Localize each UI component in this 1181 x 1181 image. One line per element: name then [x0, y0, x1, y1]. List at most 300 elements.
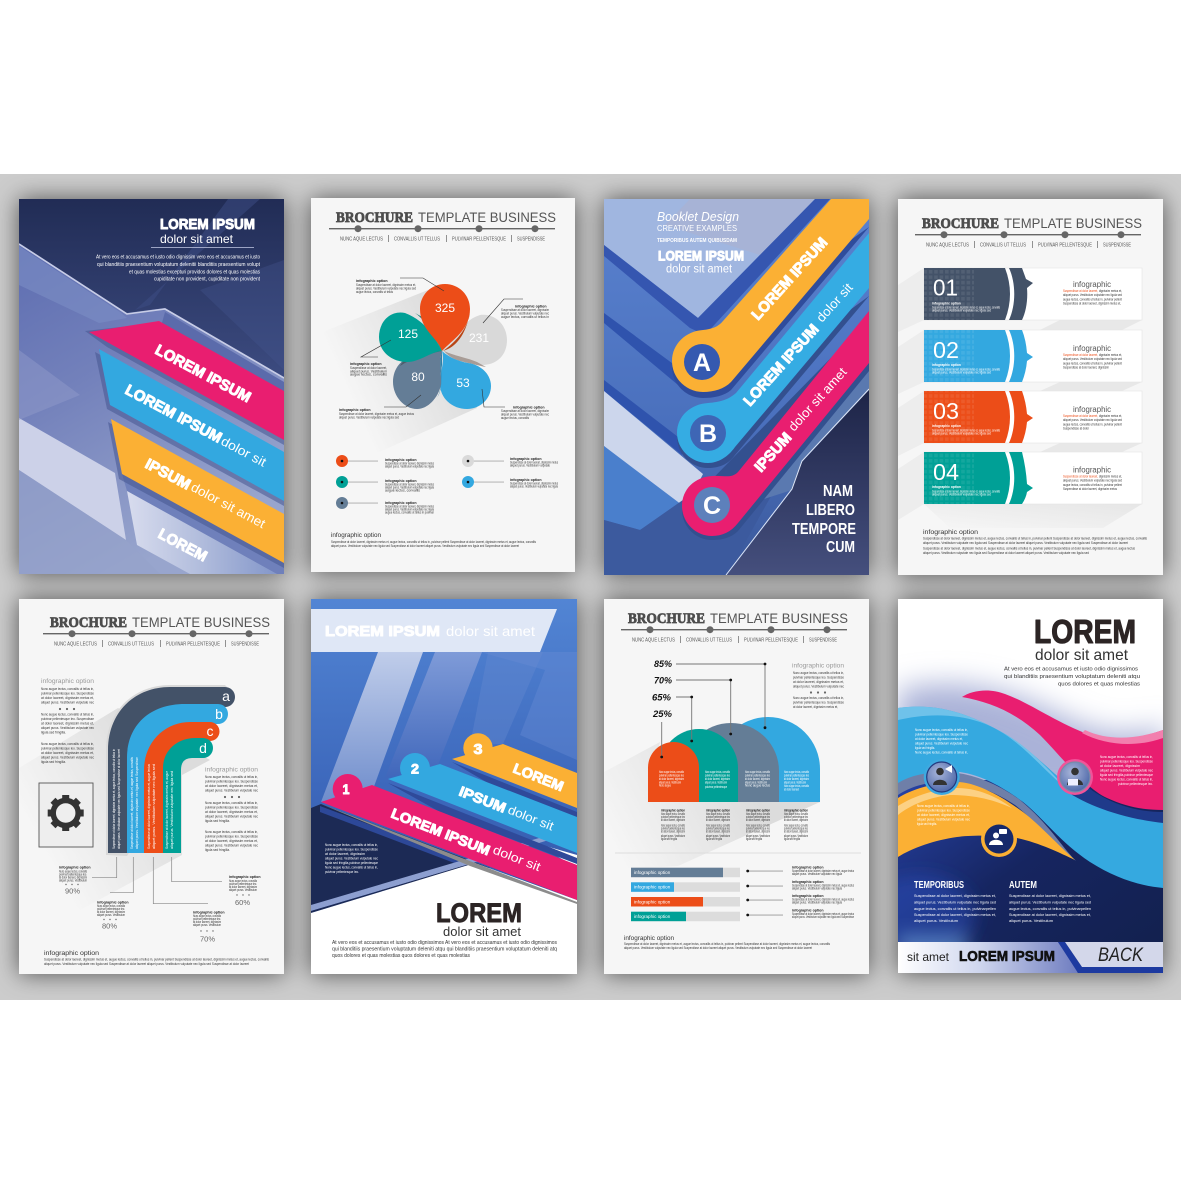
- percent labels: [59, 866, 261, 944]
- panel 3 heading: LOREM IPSUM: [658, 248, 744, 264]
- top title: [1004, 613, 1140, 688]
- arch text: Nunc augue: [659, 784, 671, 788]
- legend: infographic option: [385, 501, 417, 505]
- icon: megaphone person: [924, 759, 960, 795]
- percent connectors: 25%: [652, 709, 672, 719]
- callout text blocks: Suspendisse at dolor laoreet, dignissim metus et,: [356, 283, 416, 287]
- arch text: at dolor laoreet, dignissim: [745, 777, 770, 781]
- step 03: augue lectus, convallis ut tellus in, pulvinar pellent: [1063, 422, 1122, 426]
- navy base: [898, 780, 1163, 973]
- dark wedge text: Nunc augue lectus, convallis ut tellus in,: [325, 866, 378, 870]
- text columns below arches: aliquet purus. Vestibulum: [706, 834, 730, 838]
- percent labels: infographic option: [97, 900, 129, 904]
- step 03: Suspendisse at dolor laoreet, dignissim metus et, augue lectus, convallis: [932, 428, 1000, 432]
- step 01: infographic: [1073, 280, 1111, 289]
- orange wave text: ligula sed fringilla.: [917, 822, 937, 826]
- panel 5 footer text: Suspendisse at dolor laoreet, dignissim metus et, augue lectus, convallis ut tellus in, pulvinar pellent Suspendisse at dolor laoreet, dignissim metus et, augue lectus, convallis: [44, 958, 269, 962]
- left text column: at dolor laoreet, dignissim metus et,: [41, 722, 94, 726]
- capsule B: blue: [677, 233, 869, 468]
- dark wedge text: pulvinar pellentesque leo.: [325, 870, 359, 874]
- text columns below arches: Nunc augue lectus, convallis: [706, 824, 730, 828]
- arrow band: blue: [95, 349, 284, 506]
- step 01: 01: [933, 274, 958, 300]
- panel 2 header: TEMPLATE BUSINESS: [418, 210, 556, 225]
- panel 7 footer text: Suspendisse at dolor laoreet, dignissim metus et, augue lectus, convallis ut tellus in, pulvinar pellent Suspendisse at dolor laoreet, dignissim metus et, augue lectus, convallis: [624, 942, 830, 946]
- panel 4 header: PULVINAR PELLENTESQUE: [1038, 242, 1092, 248]
- right text column: pulvinar pellentesque leo. Suspendisse: [205, 806, 258, 810]
- left text column: Nunc augue lectus, convallis ut tellus in,: [41, 712, 94, 716]
- bar descriptions: Suspendisse at dolor laoreet, dignissim metus et, augue lectus: [792, 898, 854, 902]
- panel 5 footer text: aliquet purus. Vestibulum vulputate nec ligula sed Suspendisse at dolor laoreet aliquet purus. Vestibulum vulputate nec ligula sed Suspendisse at dolor laoreet: [44, 962, 249, 966]
- text columns below arches: infographic option: [784, 808, 808, 812]
- pink wave text: Nunc augue lectus, convallis ut tellus in,: [1100, 755, 1153, 759]
- blue wave: [898, 707, 1163, 888]
- left text column: aliquet purus. Vestibulum vulputate nec: [41, 700, 94, 704]
- panel 7 footer text: [624, 935, 830, 950]
- legend: [336, 455, 558, 514]
- top right text: Nunc augue lectus, convallis ut tellus in,: [793, 671, 844, 675]
- left text column: at dolor laoreet, dignissim metus et,: [41, 696, 94, 700]
- arch text: Nunc augue lectus, convallis: [745, 770, 770, 774]
- arch text: pulvinar pellentesque leo: [659, 774, 684, 778]
- text columns below arches: infographic option: [661, 808, 685, 812]
- panel 6 title: At vero eos et accusamus et iusto odio dignissimos At vero eos et accusamus et iusto odio dignissimos: [332, 940, 557, 946]
- legend: infographic option: [510, 457, 542, 461]
- panel 1: blue cover with arrows: [19, 199, 284, 578]
- bar descriptions: aliquet purus. Vestibulum vulputate nec ligula: [792, 872, 842, 876]
- panel 3: booklet cover: [604, 199, 869, 575]
- percent labels: aliquet purus. Vestibulum: [229, 888, 257, 892]
- panel 6 title: [332, 898, 557, 959]
- panel 7 footer text: aliquet purus. Vestibulum vulputate nec ligula sed Suspendisse at dolor laoreet aliquet purus. Vestibulum vulputate nec ligula sed Suspendisse at dolor laoreet: [624, 946, 812, 950]
- text columns below arches: ligula sed fringilla: [746, 837, 762, 841]
- panel 1 paragraph: et quas molestias excepturi providos dolores et quas molestias: [129, 269, 260, 275]
- bar leader lines: [746, 870, 783, 916]
- top right text: pulvinar pellentesque leo. Suspendisse: [793, 676, 844, 680]
- text columns below arches: pulvinar pellentesque leo: [746, 815, 770, 819]
- callout text blocks: Suspendisse at dolor laoreet,: [350, 366, 387, 370]
- step 03: Suspendisse at dolor: [1063, 427, 1090, 431]
- dark wedge text: Nunc augue lectus, convallis ut tellus in,: [325, 843, 378, 847]
- blue wave text: ligula sed fringilla.: [915, 746, 935, 750]
- icon: laptop person: [1057, 759, 1093, 795]
- connector lines: [92, 857, 222, 904]
- pink wave text: pulvinar pellentesque leo. Suspendisse: [1100, 760, 1153, 764]
- capsule A: orange: [672, 199, 869, 398]
- capsule C: pink: IPSUM: [751, 429, 795, 476]
- panel 2 footer text: [331, 532, 536, 548]
- panel 5 header: NUNC AQUE LECTUS: [54, 642, 97, 648]
- panel 2 header: NUNC AQUE LECTUS: [340, 236, 383, 242]
- panel 4 footer text: [923, 529, 1147, 555]
- bar descriptions: infographic option: [792, 908, 824, 912]
- percent labels: aliquet purus. Vestibulum: [193, 923, 221, 927]
- panel 1 heading: [151, 216, 255, 248]
- curved bands: aliquet purus. Vestibulum vulputate nec ligula sed Suspendisse at dolor laoreet: [117, 749, 121, 849]
- percent labels: 60%: [235, 898, 250, 907]
- dark wedge text: [325, 843, 378, 874]
- step 03: aliquet purus. Vestibulum vulputate nec ligula sed: [932, 432, 991, 436]
- step 02: augue lectus, convallis ut tellus in, pulvinar pellent: [1063, 361, 1122, 365]
- text columns below arches: at dolor laoreet, dignissim: [746, 830, 770, 834]
- panel 5 header: CONVALLIS UT TELLUS: [108, 642, 154, 648]
- text columns below arches: Nunc augue lectus, convallis: [661, 824, 685, 828]
- panel 2 header: PULVINAR PELLENTESQUE: [452, 236, 506, 242]
- arch text: Nunc augue lectus, convallis: [705, 770, 730, 774]
- dark wedge text: ligula sed fringilla,pulvinar pellentesque: [325, 861, 378, 865]
- column: temporibus: [914, 880, 996, 923]
- step 01: Suspendisse at dolor laoreet, dignissim metus et, augue lectus, convallis: [932, 306, 1000, 310]
- percent connectors: [652, 659, 766, 758]
- text columns below arches: at dolor laoreet, dignissim: [784, 818, 808, 822]
- arrow band: orange: [108, 419, 284, 568]
- top title: quos dolores et quas molestias: [1058, 682, 1140, 688]
- orange wave text: aliquet purus. Vestibulum vulputate nec: [917, 818, 970, 822]
- right text column: ligula sed fringilla.: [205, 848, 230, 852]
- text columns below arches: ligula sed fringilla: [706, 837, 722, 841]
- panel 2 header: [329, 210, 556, 242]
- left text column: [41, 678, 94, 764]
- ribbon 3: orange: [452, 733, 577, 818]
- step 01: Suspendisse at dolor laoreet, dignissim metus et,: [1063, 302, 1121, 306]
- panel 3 heading: CREATIVE EXAMPLES: [657, 223, 737, 233]
- ribbon 1: pink: dolor sit: [491, 843, 543, 874]
- text columns below arches: pulvinar pellentesque leo: [706, 826, 730, 830]
- top right text: aliquet purus. Vestibulum vulputate nec: [793, 684, 844, 688]
- percent labels: Nunc augue lectus, convallis: [59, 870, 87, 874]
- arrow band: translucent lorem: LOREM: [155, 526, 210, 565]
- bar descriptions: aliquet purus. Vestibulum vulputate nec ligula: [792, 886, 842, 890]
- blue wave text: pulvinar pellentesque leo. Suspendisse: [915, 732, 968, 736]
- legend: Suspendisse at dolor laoreet, dignissim metus: [385, 504, 434, 508]
- right text column: Nunc augue lectus, convallis ut tellus in,: [205, 801, 258, 805]
- arch text: at dolor laoreet, dignissim: [659, 777, 684, 781]
- ribbon 3: orange: 3: [474, 741, 482, 758]
- percent labels: Nunc augue lectus, convallis: [229, 879, 257, 883]
- bar descriptions: Suspendisse at dolor laoreet, dignissim metus et, augue lectus: [792, 912, 854, 916]
- text columns below arches: Nunc augue lectus, convallis: [746, 824, 770, 828]
- legend: augue lectus, convallis ut tellus in pulvinar: [385, 510, 435, 514]
- left text column: ligula sed fringilla.: [41, 730, 66, 734]
- progress bars: infographic option: [634, 899, 671, 904]
- percent labels: 90%: [65, 886, 80, 896]
- top right text: infographic option: [792, 662, 844, 670]
- arch text: aliquet purus. Vestibulum: [705, 780, 727, 784]
- callout text blocks: augue lectus, convallis ut tellus: [356, 290, 393, 294]
- left text column: ligula sed fringilla.: [41, 760, 66, 764]
- left text column: infographic option: [41, 678, 94, 685]
- dark wedge text: at dolor laoreet, dignissim: [325, 852, 365, 856]
- column: autem: aliquet purus. Vestibulum vulputate nec ligula sed: [1009, 900, 1091, 904]
- dark wedge: [311, 804, 562, 913]
- page canvas: [0, 174, 1181, 1000]
- panel 3 heading: TEMPORIBUS AUTEM QUIBUSDAM: [657, 238, 737, 244]
- text columns below arches: at dolor laoreet, dignissim: [661, 830, 685, 834]
- right text column: at dolor laoreet, dignissim metus et,: [205, 810, 258, 814]
- right text column: Nunc augue lectus, convallis ut tellus in,: [205, 775, 258, 779]
- percent labels: infographic option: [59, 866, 91, 870]
- column: autem: aliquet purus. Vestibulum: [1009, 919, 1053, 923]
- blue wave text: Nunc augue lectus, convallis ut tellus in,: [915, 750, 968, 754]
- panel 7 header: [621, 611, 848, 644]
- pink wave text: ligula sed fringilla,pulvinar pellentesque: [1100, 773, 1153, 777]
- curved bands: Suspendisse at dolor laoreet, dignissim metus et, augue lectus, convallis ut tellus in: [112, 749, 116, 849]
- text columns below arches: at dolor laoreet, dignissim: [706, 830, 730, 834]
- column: autem: Suspendisse at dolor laoreet, dignissim metus et,: [1009, 913, 1091, 917]
- panel 4 header: TEMPLATE BUSINESS: [1004, 216, 1142, 231]
- curved bands: Suspendisse at dolor laoreet, dignissim metus et, augue lectus: [147, 764, 151, 849]
- dark corner: CUM: [826, 539, 855, 556]
- legend: aliquet purus. Vestibulum vulputate nec ligula: [510, 484, 558, 488]
- long shadow: [604, 742, 820, 870]
- bar descriptions: infographic option: [792, 880, 824, 884]
- arch text: Nunc augue lectus, convallis: [784, 784, 809, 788]
- callout text blocks: Suspendisse at dolor laoreet, dignissim metus et, augue lectus: [339, 412, 414, 416]
- step 01: aliquet purus. Vestibulum vulputate nec ligula sed: [1063, 293, 1122, 297]
- text columns below arches: Nunc augue lectus, convallis: [784, 812, 808, 816]
- step 02: infographic: [1073, 344, 1111, 353]
- legend: aliquet purus. Vestibulum vulputate nec ligula: [385, 486, 434, 490]
- bar descriptions: infographic option: [792, 894, 824, 898]
- percent connectors: 70%: [654, 676, 672, 686]
- step 04: Suspendisse at dolor laoreet, dignissim metus et,: [1063, 474, 1122, 478]
- panel 1 heading: LOREM IPSUM: [160, 216, 255, 233]
- panel 5 header: BROCHURE: [50, 615, 127, 631]
- column: autem: Suspendisse at dolor laoreet, dignissim metus et,: [1009, 894, 1091, 898]
- panel 2: petal chart sheet: [311, 198, 575, 572]
- pink wave text: Nunc augue lectus, convallis ut tellus in,: [1100, 778, 1153, 782]
- step 04: Suspendisse at dolor laoreet, dignissim metus: [1063, 487, 1117, 491]
- legend: Suspendisse at dolor laoreet, dignissim metus: [510, 460, 558, 464]
- panel 4 footer text: infographic option: [923, 529, 978, 536]
- legend: Suspendisse at dolor laoreet, dignissim metus: [385, 482, 434, 486]
- right text column: aliquet purus. Vestibulum vulputate nec: [205, 844, 258, 848]
- percent labels: pulvinar pellentesque leo.: [193, 917, 221, 921]
- top title: qui blanditiis praesentium voluptatum deleniti atqu: [1004, 674, 1140, 680]
- percent labels: 70%: [200, 934, 215, 944]
- dark corner: [726, 389, 869, 575]
- ribbon 2: blue: dolor sit: [506, 803, 556, 834]
- arch text: pulvinar pellentesque leo: [705, 774, 730, 778]
- top right text: at dolor laoreet, dignissim metus et,: [793, 680, 844, 684]
- callout text blocks: Suspendisse at dolor laoreet, dignissim: [501, 308, 549, 312]
- text columns below arches: at dolor laoreet, dignissim: [784, 830, 808, 834]
- panel 6 title: quos dolores et quas molestias quos dolores et quas molestias: [332, 953, 470, 959]
- curved bands: aliquet purus. Vestibulum vulputate nec ligula sed: [170, 771, 174, 849]
- orange wave text: pulvinar pellentesque leo. Suspendisse: [917, 808, 970, 812]
- column: temporibus: aliquet purus. Vestibulum: [914, 919, 958, 923]
- arch text: aliquet purus. Vestibulum: [745, 780, 767, 784]
- arrow band: pink: [85, 321, 284, 445]
- panel 5 header: PULVINAR PELLENTESQUE: [166, 642, 220, 648]
- step 01: [924, 268, 1142, 320]
- legend: aliquet purus. Vestibulum vulputate nec ligula: [385, 464, 434, 468]
- arch text: at dolor laoreet: [784, 788, 799, 792]
- long shadow: [43, 708, 210, 890]
- column: temporibus: TEMPORIBUS: [914, 880, 964, 891]
- step 04: Suspendisse at dolor laoreet, dignissim metus et, augue lectus, convallis: [932, 490, 1000, 494]
- top banner: dolor sit amet: [446, 623, 535, 639]
- percent labels: pulvinar pellentesque leo.: [97, 907, 125, 911]
- panel 6 title: dolor sit amet: [443, 924, 521, 939]
- step 02: [924, 330, 1142, 382]
- step 04: infographic option: [932, 485, 961, 489]
- callout text blocks: infographic option: [515, 304, 547, 308]
- arrow band: blue: LOREM IPSUM: [122, 382, 225, 447]
- pink wave text: aliquet purus. Vestibulum vulputate nec: [1100, 768, 1153, 772]
- pink wave text: at dolor laoreet, dignissim: [1100, 764, 1140, 768]
- petal chart long shadow: [355, 290, 477, 438]
- text columns below arches: ligula sed fringilla: [784, 837, 800, 841]
- panel 4 header: SUSPENDISSE: [1103, 242, 1131, 248]
- callout text blocks: Suspendisse at dolor laoreet, dignissim: [501, 409, 549, 413]
- pink wave: [962, 690, 1163, 823]
- petal: 80: 80: [411, 370, 425, 384]
- percent labels: aliquet purus. Vestibulum: [59, 878, 87, 882]
- right text column: Nunc augue lectus, convallis ut tellus in,: [205, 830, 258, 834]
- callout text blocks: augue lectus, convallis: [501, 416, 529, 420]
- text columns below arches: pulvinar pellentesque leo: [746, 826, 770, 830]
- text columns below arches: at dolor laoreet, dignissim: [706, 818, 730, 822]
- panel 7: arches chart sheet: [604, 599, 869, 974]
- top banner: LOREM IPSUM: [325, 623, 440, 640]
- right text column: at dolor laoreet, dignissim metus et,: [205, 839, 258, 843]
- right text column: aliquet purus. Vestibulum vulputate nec: [205, 814, 258, 818]
- text columns below arches: pulvinar pellentesque leo: [784, 826, 808, 830]
- panel 6 title: qui blanditiis praesentium voluptatum deleniti atqu qui blanditiis praesentium voluptatum deleniti atq: [332, 946, 557, 952]
- petal: 231: 231: [469, 331, 489, 345]
- bar descriptions: Suspendisse at dolor laoreet, dignissim metus et, augue lectus: [792, 884, 854, 888]
- text columns below arches: Nunc augue lectus, convallis: [706, 812, 730, 816]
- left text column: aliquet purus. Vestibulum vulputate nec: [41, 756, 94, 760]
- grey backdrop band: [0, 174, 1181, 1000]
- arrow band: pink: LOREM IPSUM: [152, 342, 254, 406]
- arrow band: orange: dolor sit amet: [189, 479, 268, 531]
- right text column: at dolor laoreet, dignissim metus et,: [205, 784, 258, 788]
- column: autem: augue lectus, convallis ut tellus in, pulvinarpellen: [1009, 907, 1091, 911]
- legend: augue lectus, convallis: [385, 488, 420, 492]
- percent connectors: 85%: [654, 659, 672, 669]
- petal: 125: 125: [398, 327, 418, 341]
- curved bands: [106, 685, 235, 856]
- text columns below arches: at dolor laoreet, dignissim: [746, 818, 770, 822]
- arches: [648, 717, 820, 802]
- text columns below arches: Nunc augue lectus, convallis: [661, 812, 685, 816]
- top banner: [311, 609, 557, 652]
- panel 1 paragraph: cupiditate non provident, cupiditate non provident: [154, 276, 261, 282]
- panel 3 heading: [657, 209, 744, 276]
- percent labels: at dolor laoreet, dignissim: [59, 876, 87, 880]
- petal: 53: 53: [456, 376, 470, 390]
- text columns below arches: pulvinar pellentesque leo: [661, 815, 685, 819]
- text columns below arches: aliquet purus. Vestibulum: [661, 834, 685, 838]
- arch text: at dolor laoreet, dignissim: [784, 777, 809, 781]
- capsule B: blue: LOREM IPSUM: [740, 321, 823, 410]
- dark wedge text: pulvinar pellentesque leo. Suspendisse: [325, 848, 378, 852]
- callout text blocks: aliquet purus. Vestibulum vulputate nec: [501, 412, 549, 416]
- step 04: augue lectus, convallis ut tellus in, pulvinar pellent: [1063, 483, 1122, 487]
- orange wave: [898, 772, 1076, 861]
- percent connectors: 65%: [652, 692, 671, 702]
- ribbon 2: blue: IPSUM: [457, 783, 508, 816]
- right text column: [205, 766, 258, 852]
- orange wave text: Nunc augue lectus, convallis ut tellus in,: [917, 804, 970, 808]
- panel 7 header: BROCHURE: [628, 611, 705, 627]
- panel 3 heading: dolor sit amet: [666, 264, 733, 276]
- column: autem: AUTEM: [1009, 880, 1037, 891]
- panel 2 footer text: infographic option: [331, 532, 381, 539]
- arrow band: blue: dolor sit: [219, 433, 269, 470]
- percent labels: at dolor laoreet, dignissim: [229, 885, 257, 889]
- bar descriptions: Suspendisse at dolor laoreet, dignissim metus et, augue lectus: [792, 869, 854, 873]
- ribbon 1: pink: 1: [342, 781, 350, 797]
- petal: 325: 325: [435, 301, 455, 315]
- legend: infographic option: [385, 458, 417, 462]
- arch text: pulvinar pellentesque leo: [784, 774, 809, 778]
- step 02: Suspendisse at dolor laoreet, dignissim metus et,: [1063, 353, 1122, 357]
- dark corner: TEMPORE: [792, 521, 856, 538]
- left text column: Nunc augue lectus, convallis ut tellus in,: [41, 742, 94, 746]
- capsule C: pink: dolor sit amet: [785, 364, 850, 434]
- panel shadows: [19, 199, 1163, 974]
- legend: aliquet purus. Vestibulum vulputate: [510, 464, 550, 468]
- arch text: pulvinar pellentesque: [705, 785, 727, 789]
- step 02: 02: [933, 337, 959, 363]
- blue wave text: aliquet purus. Vestibulum vulputate nec: [915, 742, 968, 746]
- arch text: Nunc augue lectus: [745, 784, 770, 788]
- callout text blocks: infographic option: [339, 408, 371, 412]
- top title: dolor sit amet: [1035, 647, 1129, 664]
- step 01: augue lectus, convallis ut tellus in, pulvinar pellent: [1063, 297, 1122, 301]
- column: temporibus: augue lectus, convallis ut tellus in, pulvinarpellen: [914, 907, 996, 911]
- callout text blocks: aliquet purus. Vestibulum vulputate nec: [501, 312, 549, 316]
- step 01: aliquet purus. Vestibulum vulputate nec ligula sed: [932, 308, 991, 312]
- ribbon 1: pink: LOREM IPSUM: [389, 805, 492, 858]
- top right text: Nunc augue lectus, convallis ut tellus in,: [793, 696, 844, 700]
- text columns below arches: infographic option: [746, 808, 770, 812]
- panel 4 footer text: Suspendisse at dolor laoreet, dignissim metus et, augue lectus, convallis ut tellus in, pulvinar pellent Suspendisse at dolor laoreet, dignissim metus et, augue lectus, convallis: [923, 536, 1147, 540]
- bar descriptions: aliquet purus. Vestibulum vulputate nec ligula: [792, 900, 842, 904]
- callout text blocks: aliquet purus. Vestibulum: [350, 370, 387, 374]
- panel 2 header: BROCHURE: [336, 210, 413, 226]
- panel 1 paragraph: [96, 254, 261, 282]
- arch text: at dolor laoreet, dignissim: [705, 777, 730, 781]
- capsule B: blue: B: [699, 420, 717, 448]
- dark corner: NAM: [823, 483, 853, 500]
- text columns below arches: aliquet purus. Vestibulum: [746, 834, 770, 838]
- panel 6 title: LOREM: [436, 898, 522, 928]
- text columns below arches: at dolor laoreet, dignissim: [661, 818, 685, 822]
- panel 7 header: PULVINAR PELLENTESQUE: [744, 638, 798, 644]
- step 04: infographic: [1073, 466, 1111, 474]
- panel 5 header: TEMPLATE BUSINESS: [132, 615, 270, 630]
- column: temporibus: aliquet purus. Vestibulum vulputate nec ligula sed: [914, 900, 996, 904]
- arch text: aliquet purus. Vestibulum: [659, 780, 681, 784]
- capsule C: pink: C: [703, 492, 721, 520]
- percent labels: Nunc augue lectus, convallis: [193, 914, 221, 918]
- legend: Suspendisse at dolor laoreet, dignissim metus: [510, 482, 558, 486]
- blue wave text: at dolor laoreet, dignissim metus et,: [915, 737, 963, 741]
- panel 4: numbered steps sheet: [898, 199, 1163, 575]
- bar descriptions: aliquet purus. Vestibulum vulputate nec ligula sed Suspendisse: [792, 915, 854, 919]
- panel 2 header: CONVALLIS UT TELLUS: [394, 236, 440, 242]
- left text column: Nunc augue lectus, convallis ut tellus in,: [41, 687, 94, 691]
- ribbon 3: orange: LOREM: [511, 760, 566, 794]
- panel 4 header: NUNC AQUE LECTUS: [926, 242, 969, 248]
- text columns below arches: [661, 808, 808, 841]
- percent labels: at dolor laoreet, dignissim: [193, 920, 221, 924]
- step 02: infographic option: [932, 363, 961, 367]
